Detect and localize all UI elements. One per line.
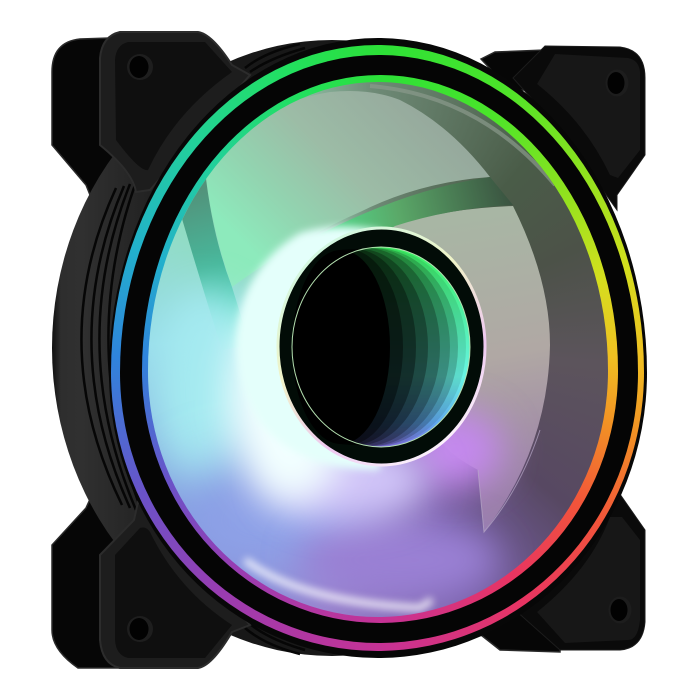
blade: upper — [205, 91, 490, 287]
hub outer rim — [278, 228, 485, 465]
strut: teal left — [182, 179, 240, 331]
strut: green — [326, 177, 513, 232]
bottom glint — [245, 560, 432, 608]
corner: top left — [100, 32, 250, 192]
hub with infinity mirror — [278, 228, 485, 465]
front ring black bezel — [109, 38, 647, 658]
impeller blades and glow — [148, 84, 554, 616]
corner: bottom left — [100, 502, 250, 668]
colour glows — [155, 290, 503, 600]
mirror thin edge — [292, 247, 470, 447]
outer RGB LED ring — [111, 45, 644, 651]
hub shoulder highlight — [236, 227, 380, 470]
black band between LED rings — [120, 55, 638, 643]
blade: right — [380, 206, 550, 532]
upper rim shine — [370, 86, 555, 185]
corner: bottom right — [515, 490, 645, 650]
fan body side — [52, 40, 612, 656]
body ribs — [81, 44, 305, 654]
translucent disc base — [148, 82, 608, 617]
inner RGB LED ring — [142, 75, 618, 623]
blade lower edge — [478, 430, 540, 532]
mirror reflections — [292, 248, 466, 446]
rear mounting tabs — [52, 38, 560, 668]
corner: top right — [513, 46, 645, 210]
mirror light — [292, 247, 470, 447]
